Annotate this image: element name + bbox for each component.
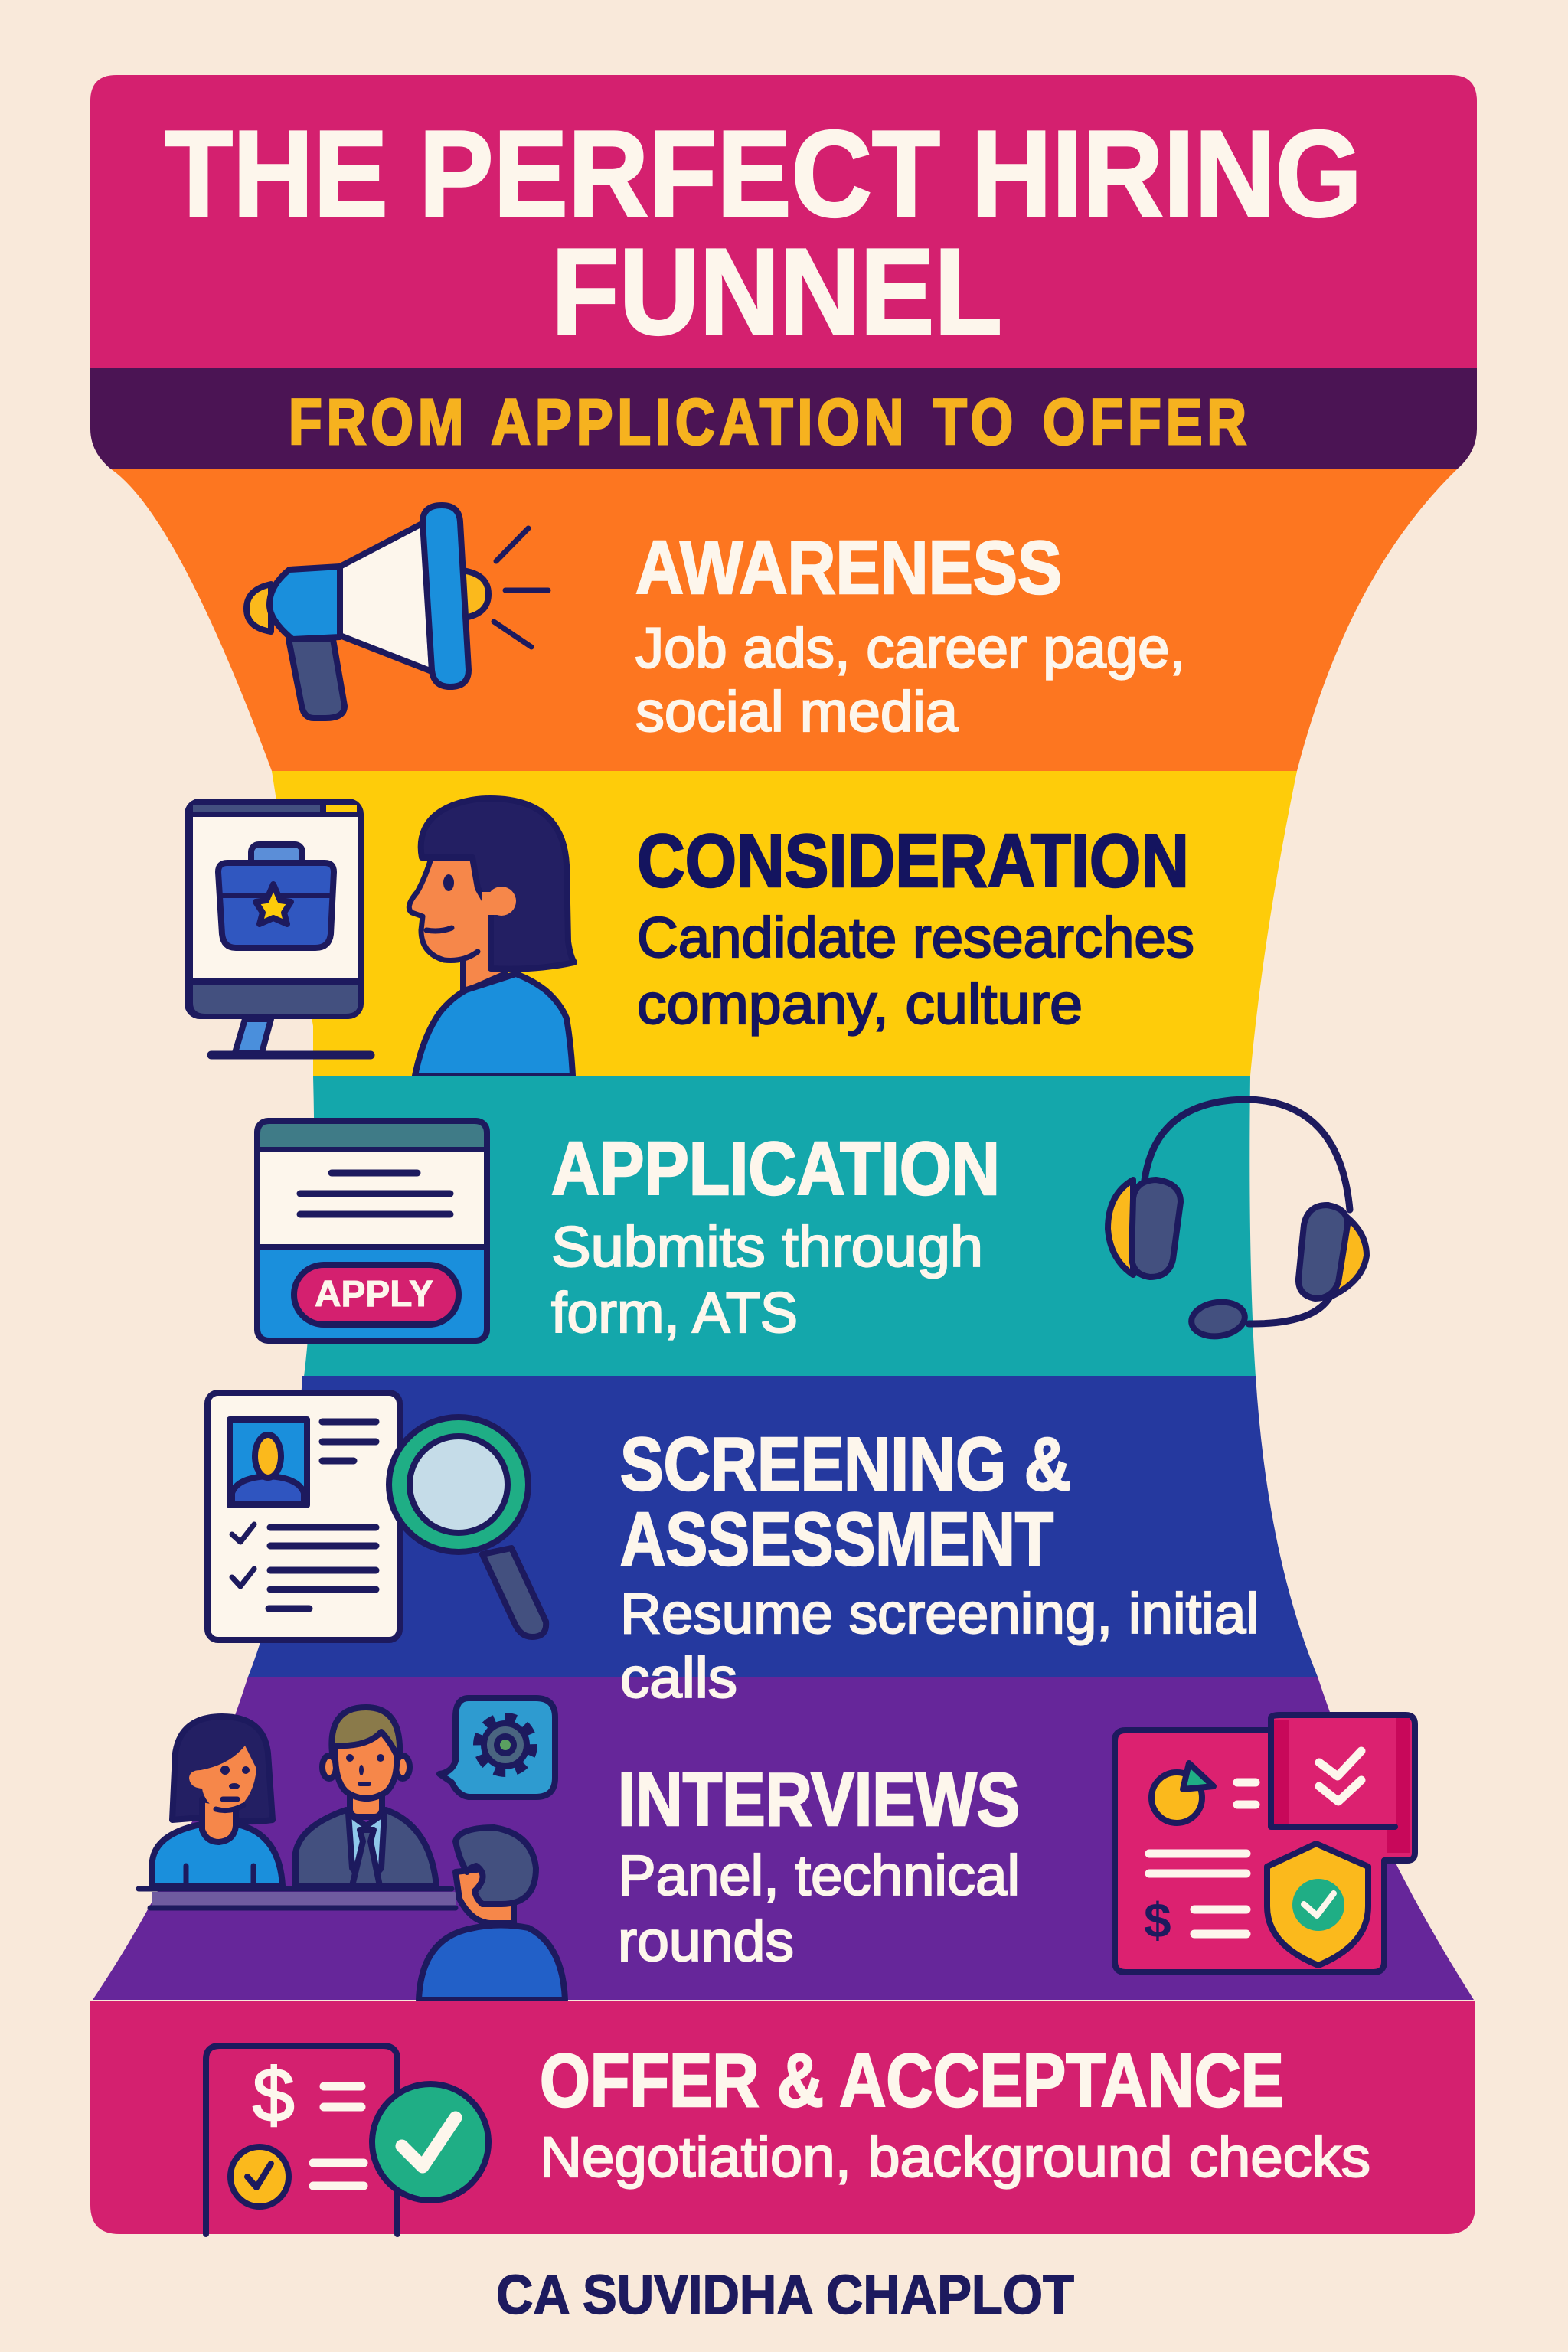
panel: consideration — [185, 771, 1297, 1076]
description: consideration: company, culture — [637, 972, 1083, 1036]
heading: awareness: AWARENESS — [635, 525, 1062, 609]
panel: screening and assessment — [207, 1376, 1318, 1710]
description: interviews — [618, 1844, 1020, 1973]
panel: offer and acceptance — [90, 2001, 1475, 2234]
icon: computer with briefcase — [185, 799, 371, 1055]
description: interviews: Panel, technical — [618, 1844, 1020, 1907]
description: application — [551, 1215, 983, 1344]
icon: document with shield: $ — [1144, 1893, 1171, 1948]
heading: application: APPLICATION — [551, 1126, 1000, 1210]
description: screening: calls — [620, 1646, 737, 1710]
description: consideration — [637, 906, 1194, 1036]
heading: offer and acceptance: OFFER & ACCEPTANCE — [540, 2038, 1284, 2122]
icon: magnifying glass — [389, 1417, 546, 1637]
heading: screening and assessment: ASSESSMENT — [620, 1497, 1054, 1581]
green check badge — [372, 2084, 488, 2200]
description: consideration: Candidate researches — [637, 906, 1194, 969]
icon: offer document: $ — [253, 2053, 295, 2137]
heading: screening and assessment — [620, 1422, 1071, 1581]
description: awareness: Job ads, career page, — [635, 616, 1185, 680]
header panel — [90, 75, 1477, 469]
footer credit: CA SUVIDHA CHAPLOT — [496, 2265, 1074, 2326]
description: offer: Negotiation, background checks — [540, 2125, 1370, 2189]
panel: interviews — [93, 1677, 1474, 2000]
icon: resume — [207, 1393, 400, 1640]
man interviewer — [296, 1707, 436, 1886]
icon: document with shield — [1115, 1715, 1415, 1972]
apply button — [294, 1265, 459, 1325]
description: awareness: social media — [635, 680, 959, 743]
panel: awareness — [110, 469, 1458, 771]
description: awareness — [635, 616, 1185, 743]
woman interviewer — [152, 1717, 283, 1886]
description: screening: Resume screening, initial — [620, 1582, 1259, 1645]
speech bubble with gear — [439, 1698, 555, 1797]
icon: headset — [1108, 1099, 1367, 1340]
icon: interview panel scene — [139, 1698, 565, 2000]
icon: application form — [254, 1118, 490, 1344]
icon: megaphone — [247, 505, 548, 718]
heading: consideration: CONSIDERATION — [637, 818, 1189, 903]
description: screening — [620, 1582, 1259, 1710]
description: interviews: rounds — [618, 1909, 794, 1973]
title — [165, 105, 1362, 360]
panel: application — [254, 1076, 1367, 1377]
apply button: APPLY — [315, 1274, 433, 1315]
title: FUNNEL — [551, 223, 1002, 360]
icon: candidate person — [409, 799, 574, 1076]
table — [139, 1889, 456, 1908]
heading: screening and assessment: SCREENING & — [620, 1422, 1071, 1506]
description: application: form, ATS — [551, 1281, 798, 1344]
candidate from behind — [419, 1828, 565, 2000]
subtitle: FROM APPLICATION TO OFFER — [289, 386, 1251, 458]
description: application: Submits through — [551, 1215, 983, 1279]
icon: offer document — [206, 2046, 488, 2234]
title: THE PERFECT HIRING — [165, 105, 1362, 242]
heading: interviews: INTERVIEWS — [618, 1757, 1020, 1841]
